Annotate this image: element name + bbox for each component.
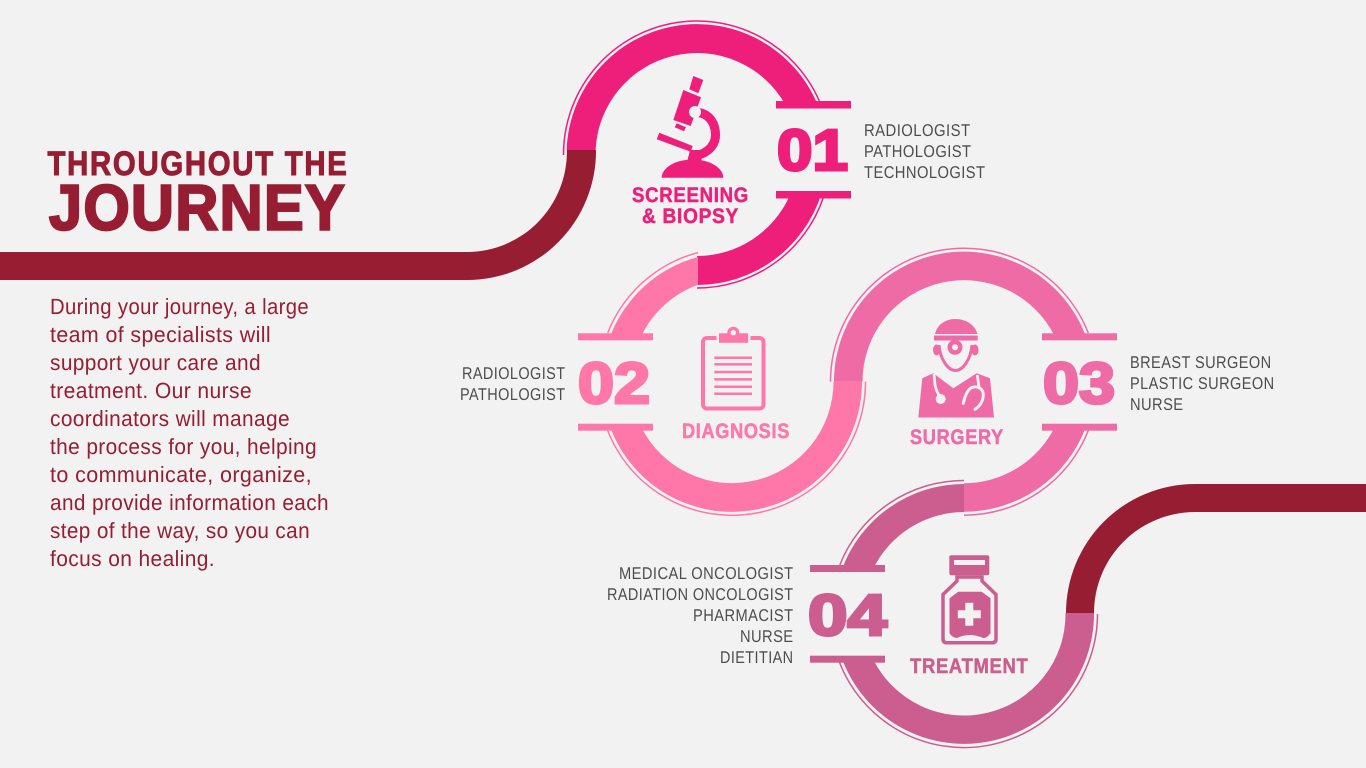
ring 03	[830, 248, 1088, 515]
staff list 01: RADIOLOGIST	[864, 121, 970, 140]
staff list 04: DIETITIAN	[720, 648, 794, 667]
number 02	[578, 333, 653, 431]
label: treatment: TREATMENT	[910, 655, 1028, 678]
staff list 03: NURSE	[1130, 395, 1184, 414]
staff list 01	[864, 121, 986, 182]
number 03: 03	[1043, 351, 1115, 416]
number 02: 02	[578, 351, 650, 416]
staff list 03: BREAST SURGEON	[1130, 353, 1272, 372]
intro text block	[50, 294, 329, 571]
label: screening and biopsy: SCREENING	[632, 184, 749, 207]
intro text block: coordinators will manage	[50, 406, 290, 431]
label: surgery: SURGERY	[910, 426, 1004, 449]
title: JOURNEY	[49, 172, 346, 244]
number 01: 01	[777, 118, 848, 183]
staff list 04: MEDICAL ONCOLOGIST	[619, 564, 794, 583]
staff list 02: RADIOLOGIST	[462, 364, 566, 383]
ring 01	[563, 21, 823, 288]
intro text block: focus on healing.	[50, 546, 215, 571]
number 01	[776, 101, 851, 198]
panel: step 04 treatment	[808, 480, 1098, 748]
label: screening and biopsy: & BIOPSY	[642, 205, 739, 228]
icon: microscope	[657, 76, 723, 178]
intro text block: During your journey, a large	[50, 294, 309, 319]
staff list 04: RADIATION ONCOLOGIST	[607, 585, 794, 604]
title	[48, 145, 348, 244]
staff list 04	[607, 564, 794, 667]
intro text block: the process for you, helping	[50, 434, 317, 459]
intro text block: to communicate, organize,	[50, 462, 312, 487]
staff list 04: PHARMACIST	[693, 606, 794, 625]
intro text block: support your care and	[50, 350, 261, 375]
staff list 02: PATHOLOGIST	[460, 385, 566, 404]
icon: clipboard	[703, 327, 764, 408]
panel: step 03 surgery	[830, 248, 1117, 515]
panel: step 02 diagnosis	[578, 253, 866, 515]
staff list 03: PLASTIC SURGEON	[1130, 374, 1274, 393]
intro text block: treatment. Our nurse	[50, 378, 252, 403]
intro text block: and provide information each	[50, 490, 329, 515]
staff list 03	[1130, 353, 1274, 414]
label: screening and biopsy	[632, 184, 749, 228]
staff list 04: NURSE	[740, 627, 794, 646]
number 03	[1042, 333, 1117, 431]
icon: surgeon	[918, 319, 994, 418]
incoming dark path	[0, 150, 596, 280]
intro text block: step of the way, so you can	[50, 518, 310, 543]
number 04	[808, 565, 887, 663]
staff list 01: PATHOLOGIST	[864, 142, 972, 161]
title: THROUGHOUT THE	[48, 145, 348, 183]
intro text block: team of specialists will	[50, 322, 271, 347]
number 04: 04	[808, 583, 887, 648]
outgoing dark path	[1066, 484, 1366, 613]
label: diagnosis: DIAGNOSIS	[682, 420, 790, 443]
panel: step 01 screening and biopsy	[563, 21, 851, 288]
ring 04	[839, 480, 1098, 748]
icon: medicine bottle	[943, 555, 996, 643]
staff list 02	[460, 364, 566, 404]
ring 02	[608, 253, 866, 515]
staff list 01: TECHNOLOGIST	[864, 163, 986, 182]
